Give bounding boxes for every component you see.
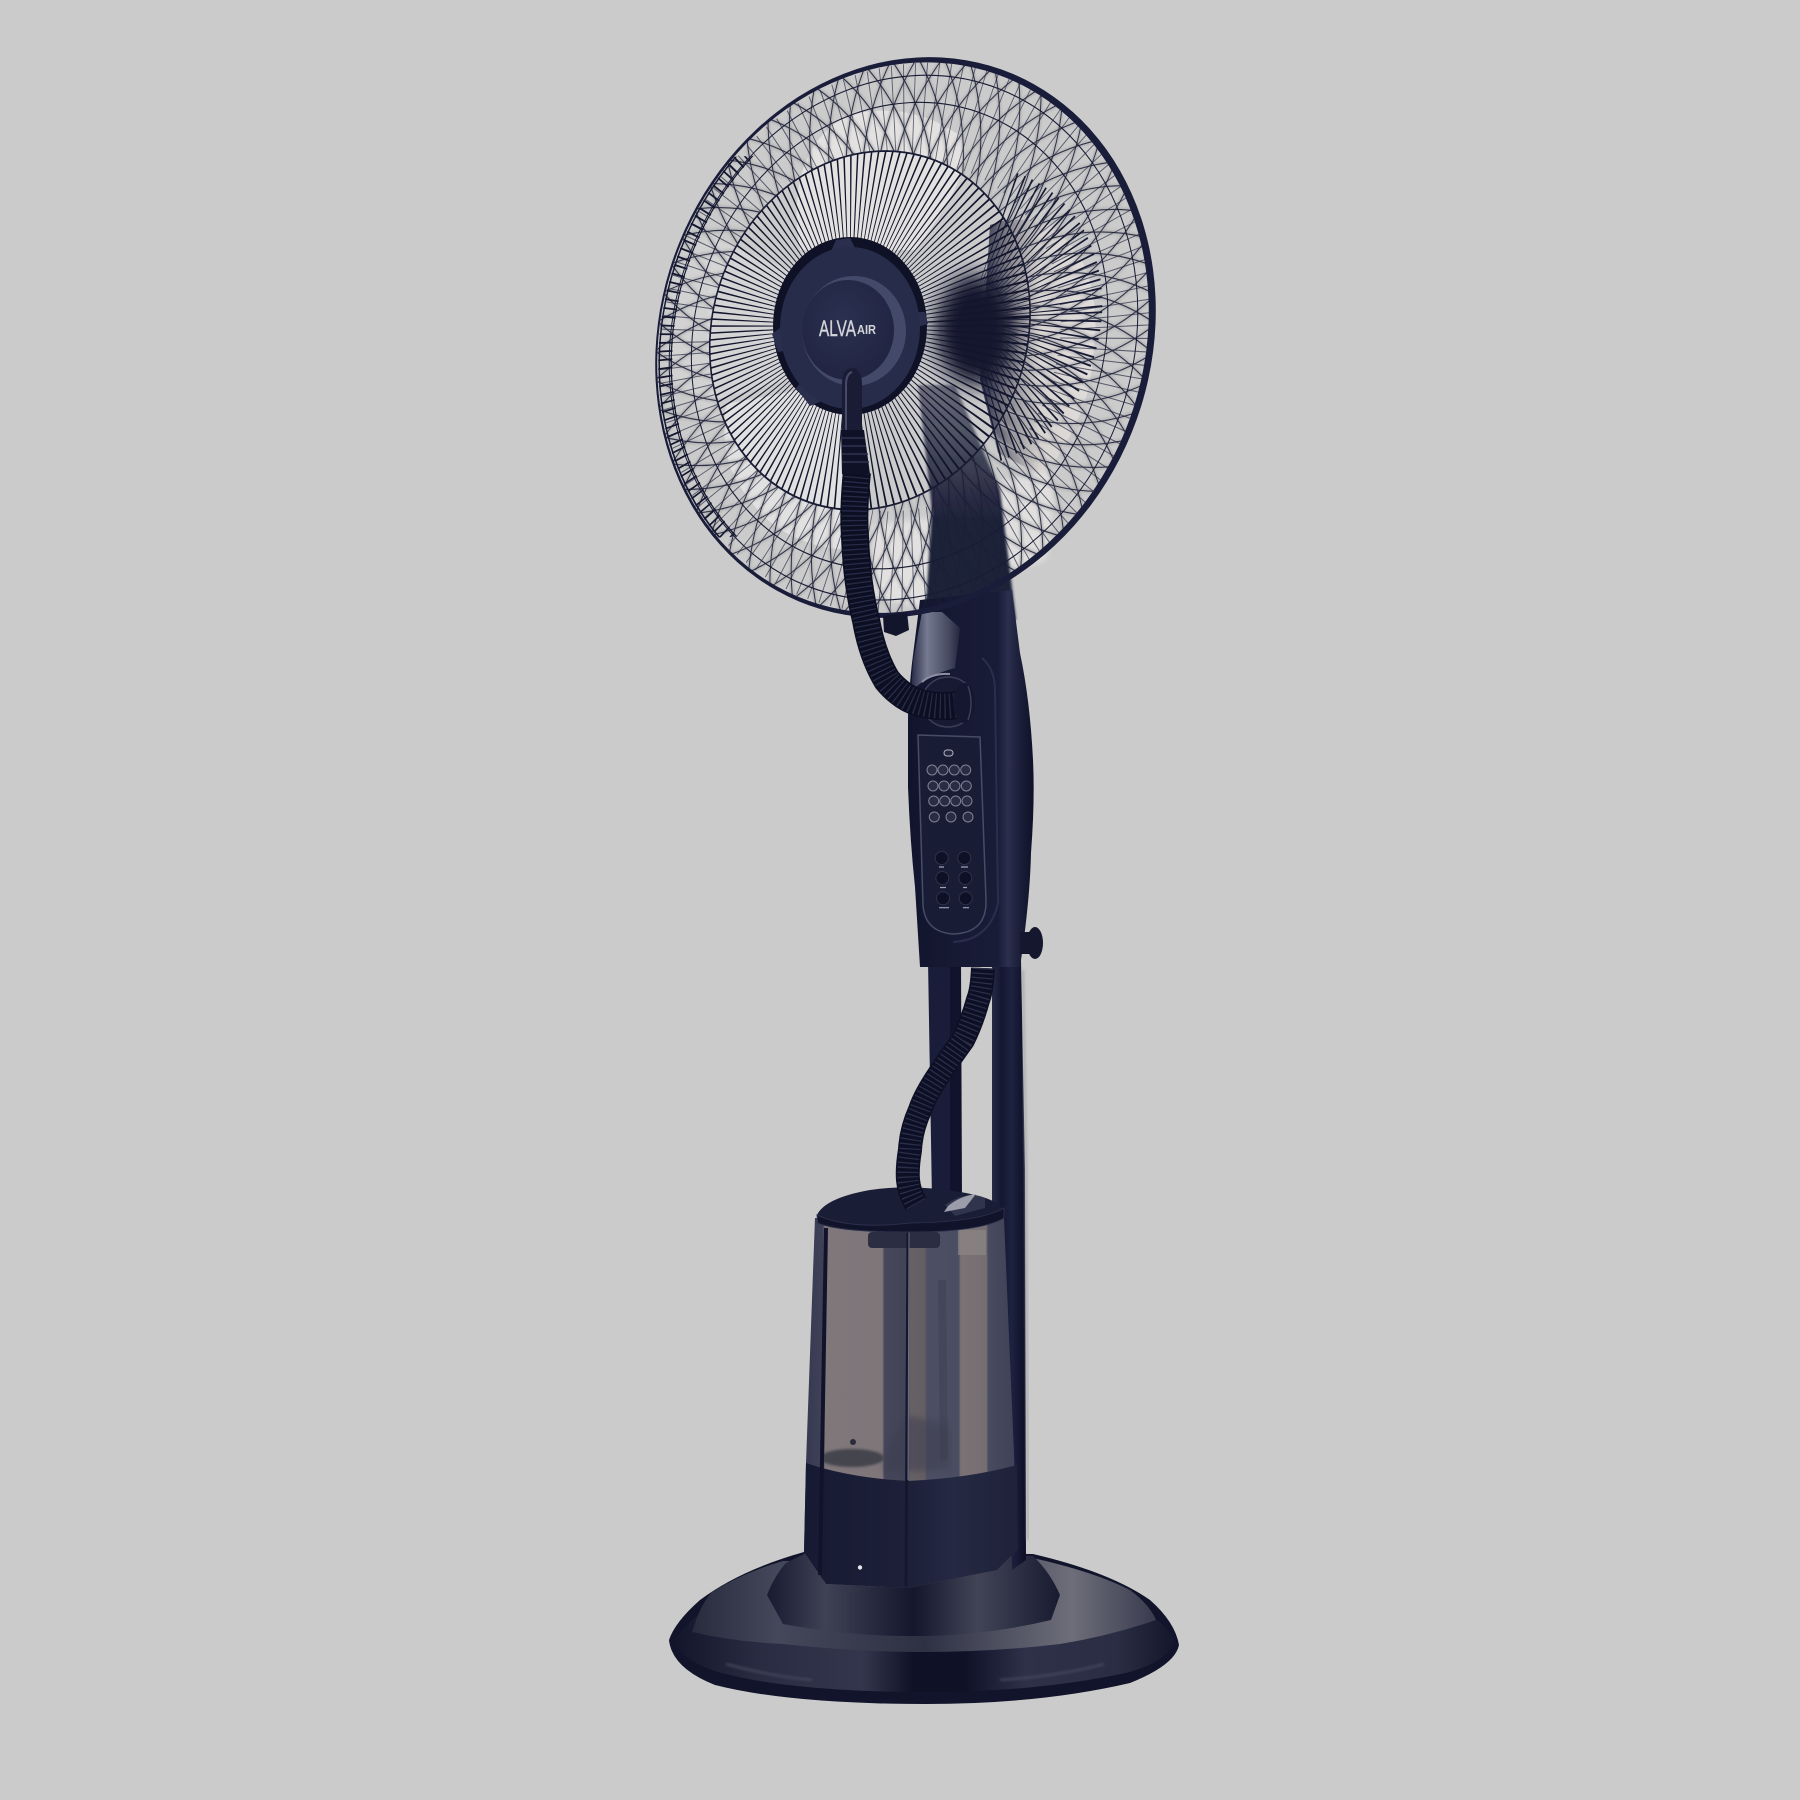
control keypad (918, 735, 986, 934)
hub (772, 237, 928, 415)
fan blades (665, 111, 1095, 612)
mist nozzle tube (841, 368, 870, 474)
motor shadow (935, 274, 1015, 386)
left side cage edge (658, 156, 754, 538)
hose end nut (953, 683, 975, 723)
tank inner parts (820, 1230, 986, 1472)
touch buttons (927, 765, 973, 822)
water tank (804, 1218, 1018, 1588)
brand logo: AIR (857, 323, 876, 337)
knob captions (939, 867, 969, 908)
hub light ring (802, 276, 906, 386)
upper mist hose (854, 472, 958, 706)
tank water (804, 1463, 1018, 1588)
lower mist hose (908, 968, 983, 1204)
hub centre disc (802, 280, 894, 380)
control panel surround (953, 658, 998, 942)
pole body (908, 590, 1034, 967)
outer spiral mesh (658, 62, 1149, 613)
round control knobs (935, 852, 972, 905)
tank indicator light (858, 1565, 862, 1570)
product illustration: misting fan (655, 57, 1179, 1704)
tank seams (820, 1228, 909, 1586)
keypad status icon (944, 750, 953, 756)
height adjustment knob (1020, 927, 1043, 959)
base collar (767, 1554, 1060, 1636)
grille rings (658, 63, 1149, 612)
grille clamp (883, 612, 909, 636)
hub tabs (772, 238, 928, 406)
fan grille assembly (655, 57, 1156, 618)
silver neck (911, 612, 960, 692)
brand logo: ALVA (819, 316, 856, 341)
blurred mesh shading (658, 62, 1148, 613)
front radial spokes (698, 156, 1002, 496)
outer radial wires (696, 103, 1115, 572)
rear support pole (992, 960, 1028, 1570)
base (669, 1552, 1179, 1704)
motor mount and post behind the grille (918, 385, 1016, 620)
tank lid (817, 1187, 1004, 1232)
rear radial wires (878, 219, 1056, 418)
outer rim (644, 44, 1168, 631)
front support tubes (928, 960, 962, 1200)
hose connector (922, 674, 974, 727)
